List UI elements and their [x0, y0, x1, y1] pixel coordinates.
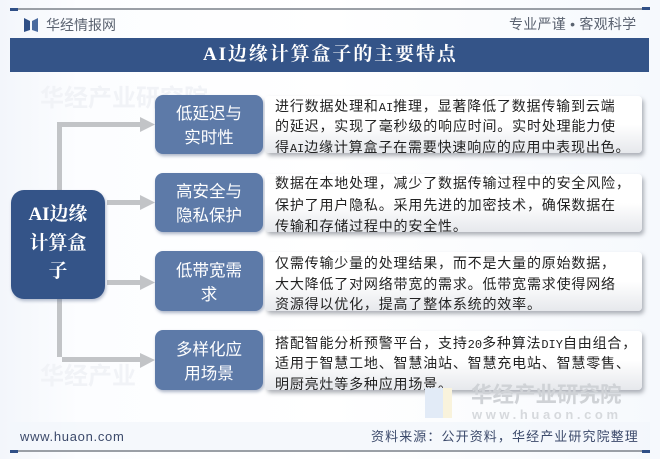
feature label: scenarios	[155, 330, 263, 390]
description: bandwidth	[265, 252, 642, 311]
description: low latency: 的延迟，实现了毫秒级的响应时间。实时处理能力使	[275, 118, 616, 134]
feature label: bandwidth: 低带宽需	[176, 262, 242, 280]
description: scenarios: 适用于智慧工地、智慧油站、智慧充电站、智慧零售、	[275, 355, 631, 371]
watermark company name: 华经产业研究院	[471, 383, 622, 407]
central box: 计算盒	[29, 232, 86, 254]
description: security: 数据在本地处理，减少了数据传输过程中的安全风险，	[275, 175, 631, 191]
feature label: security	[155, 173, 263, 232]
feature label: scenarios: 多样化应	[176, 340, 242, 358]
feature label: low latency: 实时性	[184, 129, 234, 147]
feature label: security: 隐私保护	[176, 207, 242, 225]
arrow to scenarios	[57, 298, 155, 368]
feature label: low latency	[155, 95, 263, 154]
central box	[11, 190, 105, 299]
website url: www.huaon.com	[20, 429, 124, 444]
arrow to security	[107, 195, 155, 210]
description: low latency: 得AI边缘计算盒子在需要快速响应的应用中表现出色。	[275, 139, 630, 156]
logo icon	[24, 18, 38, 32]
description: security	[265, 174, 642, 232]
watermark top left: 华经产业研究院	[40, 85, 208, 112]
arrow to bandwidth	[107, 275, 155, 290]
title bar	[10, 38, 649, 72]
title bar: AI边缘计算盒子的主要特点	[203, 44, 458, 65]
description: bandwidth: 大大降低了对网络带宽的需求。低带宽需求使得网络	[275, 276, 616, 292]
description: low latency: 进行数据处理和AI推理，显著降低了数据传输到云端	[275, 98, 615, 115]
description: scenarios	[265, 331, 642, 390]
description: low latency	[265, 96, 642, 153]
central box: 子	[48, 261, 68, 282]
top rule	[10, 8, 650, 10]
feature label: scenarios: 用场景	[184, 364, 234, 382]
brand name: 华经情报网	[46, 17, 116, 33]
description: scenarios: 明厨亮灶等多种应用场景。	[275, 376, 453, 392]
description: security: 保护了用户隐私。采用先进的加密技术，确保数据在	[275, 197, 616, 213]
tagline: 专业严谨 • 客观科学	[509, 16, 636, 32]
bottom rule	[10, 450, 650, 452]
feature label: low latency: 低延迟与	[176, 105, 242, 123]
watermark url: www.huaon.com	[472, 407, 622, 422]
description: bandwidth: 资源得以优化，提高了整体系统的效率。	[275, 296, 542, 312]
footer band	[10, 422, 650, 450]
source note: 资料来源：公开资料，华经产业研究院整理	[371, 429, 639, 444]
central box: AI边缘	[28, 204, 88, 225]
description: security: 传输和存储过程中的安全性。	[275, 218, 468, 234]
watermark bottom left: 华经产业	[40, 363, 136, 390]
watermark logo	[425, 388, 452, 418]
description: scenarios: 搭配智能分析预警平台，支持20多种算法DIY自由组合，	[275, 335, 637, 352]
feature label: bandwidth: 求	[201, 286, 217, 304]
feature label: security: 高安全与	[176, 183, 242, 201]
feature label: bandwidth	[155, 251, 263, 311]
description: bandwidth: 仅需传输少量的处理结果，而不是大量的原始数据，	[275, 255, 616, 271]
arrow to low latency	[57, 117, 155, 190]
